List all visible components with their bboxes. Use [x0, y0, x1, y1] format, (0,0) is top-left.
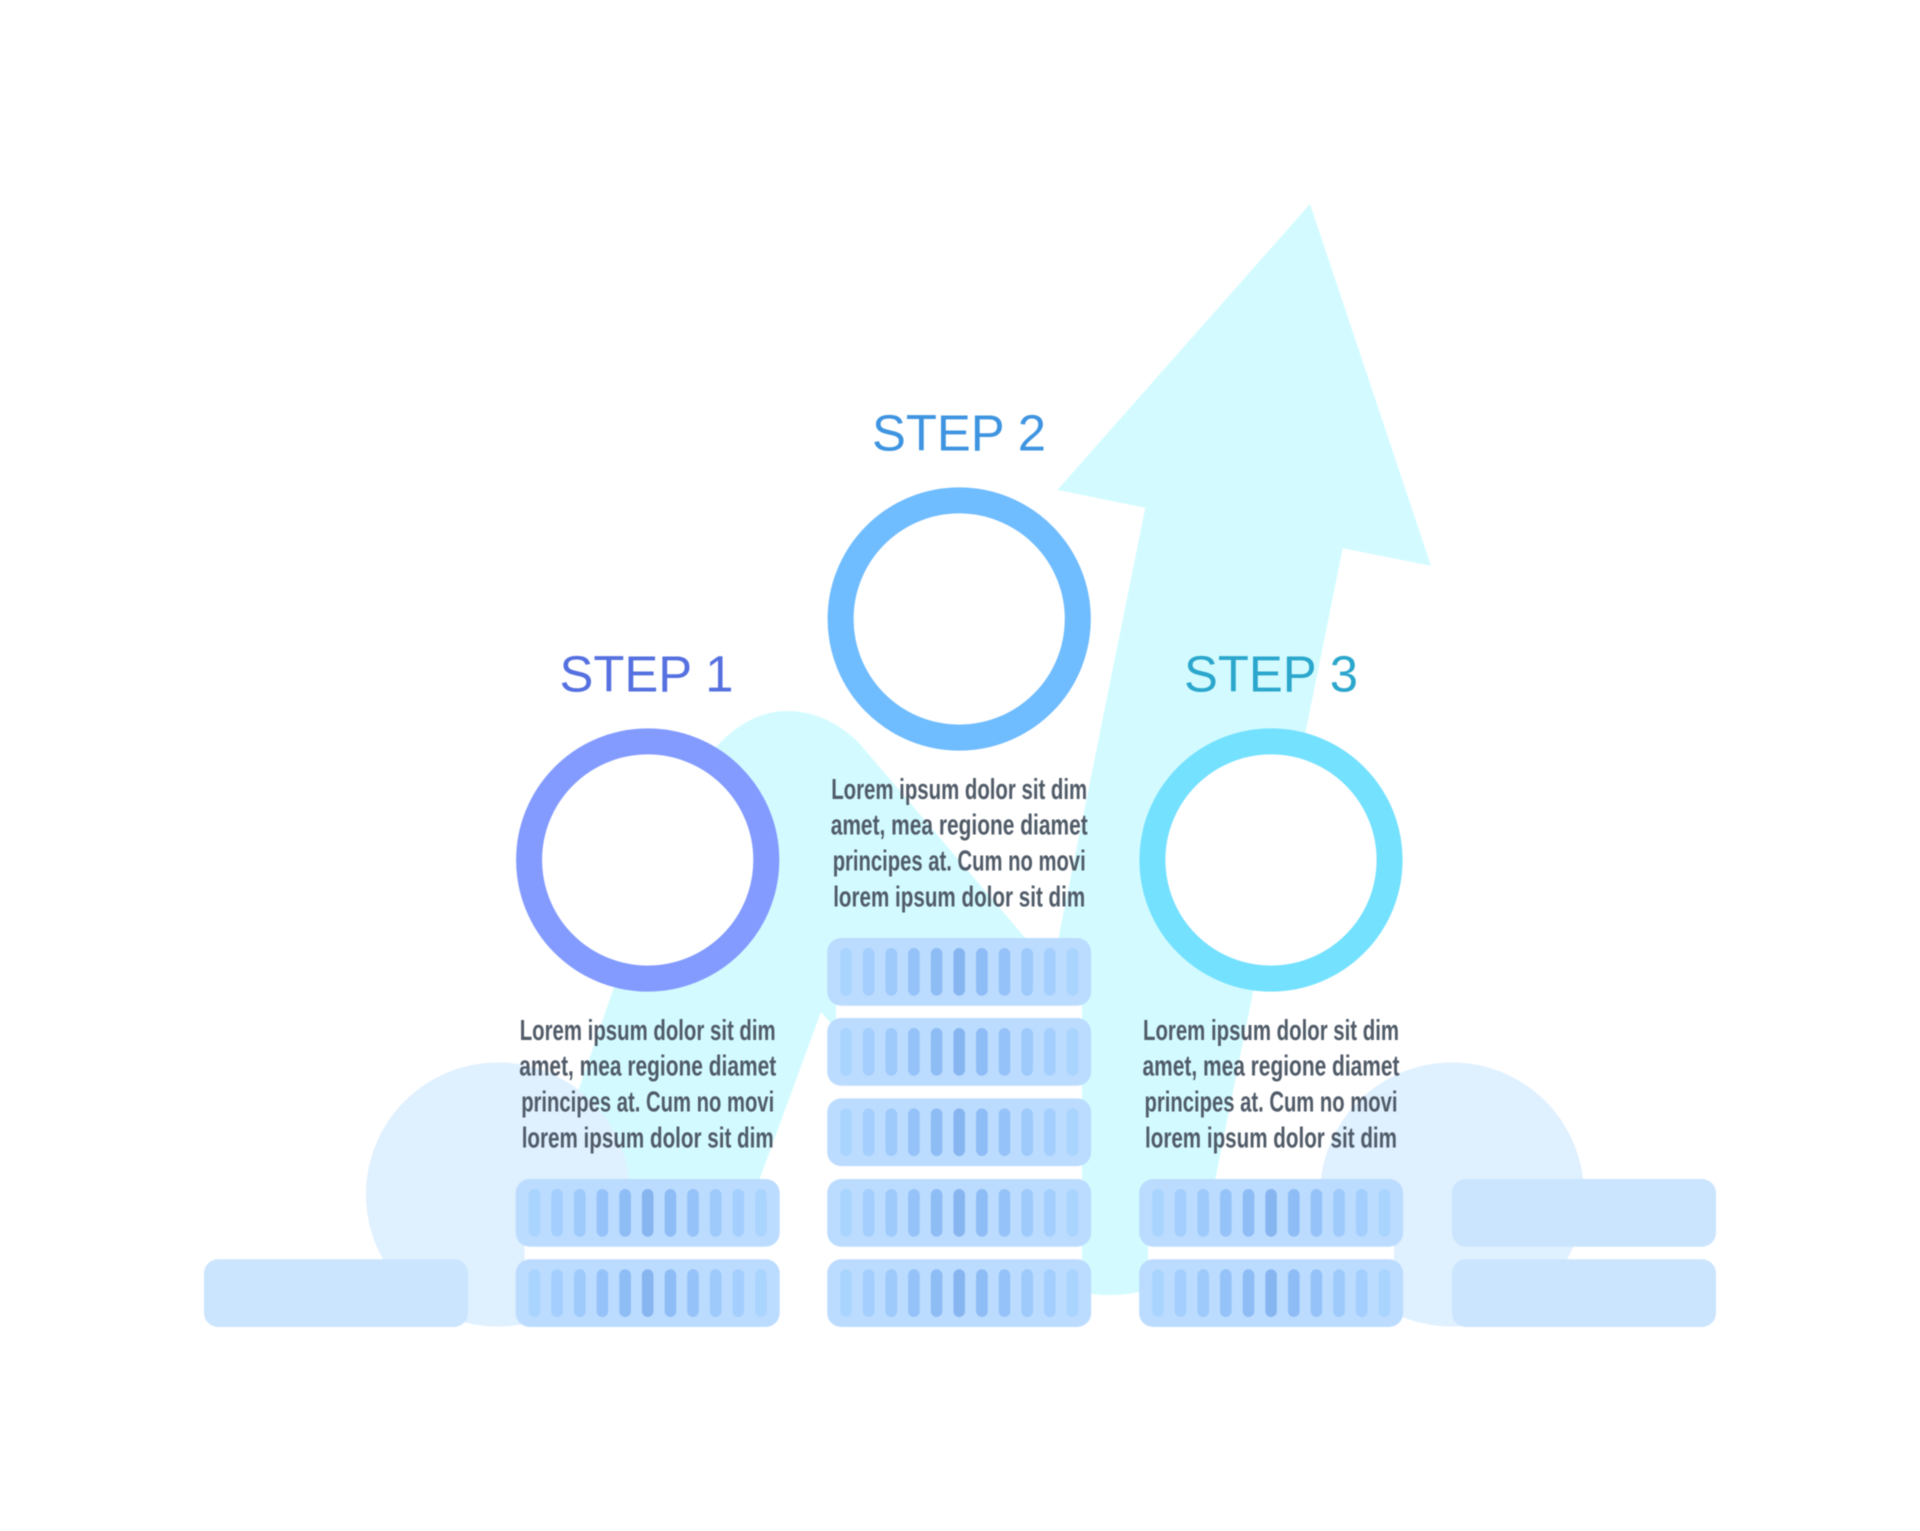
background circle right	[1320, 1062, 1584, 1326]
step 2 text block: amet, mea regione diamet	[831, 810, 1088, 842]
step 3 text block	[1142, 1015, 1400, 1154]
step 1 text block: lorem ipsum dolor sit dim	[522, 1122, 774, 1154]
coin stack step 2	[827, 938, 1091, 1327]
step 1 text block: principes at. Cum no movi	[521, 1087, 774, 1119]
step 2 heading: STEP 2	[872, 404, 1046, 462]
coin stack step 1	[516, 1179, 780, 1327]
background growth arrow	[527, 204, 1431, 1295]
step 1 text block: Lorem ipsum dolor sit dim	[520, 1015, 776, 1047]
step 2 text block: lorem ipsum dolor sit dim	[833, 881, 1085, 913]
coin stack step 3	[1139, 1179, 1403, 1327]
step 2 text block: principes at. Cum no movi	[833, 846, 1086, 878]
step 3 text block: amet, mea regione diamet	[1142, 1051, 1400, 1083]
step 3 ring	[1152, 741, 1390, 979]
step 3 heading: STEP 3	[1184, 646, 1358, 702]
step 1 ring	[529, 741, 766, 979]
step 1 text block	[519, 1015, 776, 1154]
step 2 text block	[831, 774, 1088, 913]
step 3 text block: Lorem ipsum dolor sit dim	[1143, 1015, 1399, 1047]
step 3 text block: lorem ipsum dolor sit dim	[1145, 1122, 1397, 1154]
step 3 text block: principes at. Cum no movi	[1144, 1087, 1398, 1119]
background circle left	[366, 1062, 630, 1326]
blank coin left	[204, 1259, 468, 1327]
step 2 ring	[841, 500, 1078, 738]
step 1 heading: STEP 1	[559, 646, 734, 702]
blank coin stack right	[1452, 1179, 1716, 1327]
step 2 text block: Lorem ipsum dolor sit dim	[831, 774, 1087, 806]
step 1 text block: amet, mea regione diamet	[519, 1051, 776, 1083]
